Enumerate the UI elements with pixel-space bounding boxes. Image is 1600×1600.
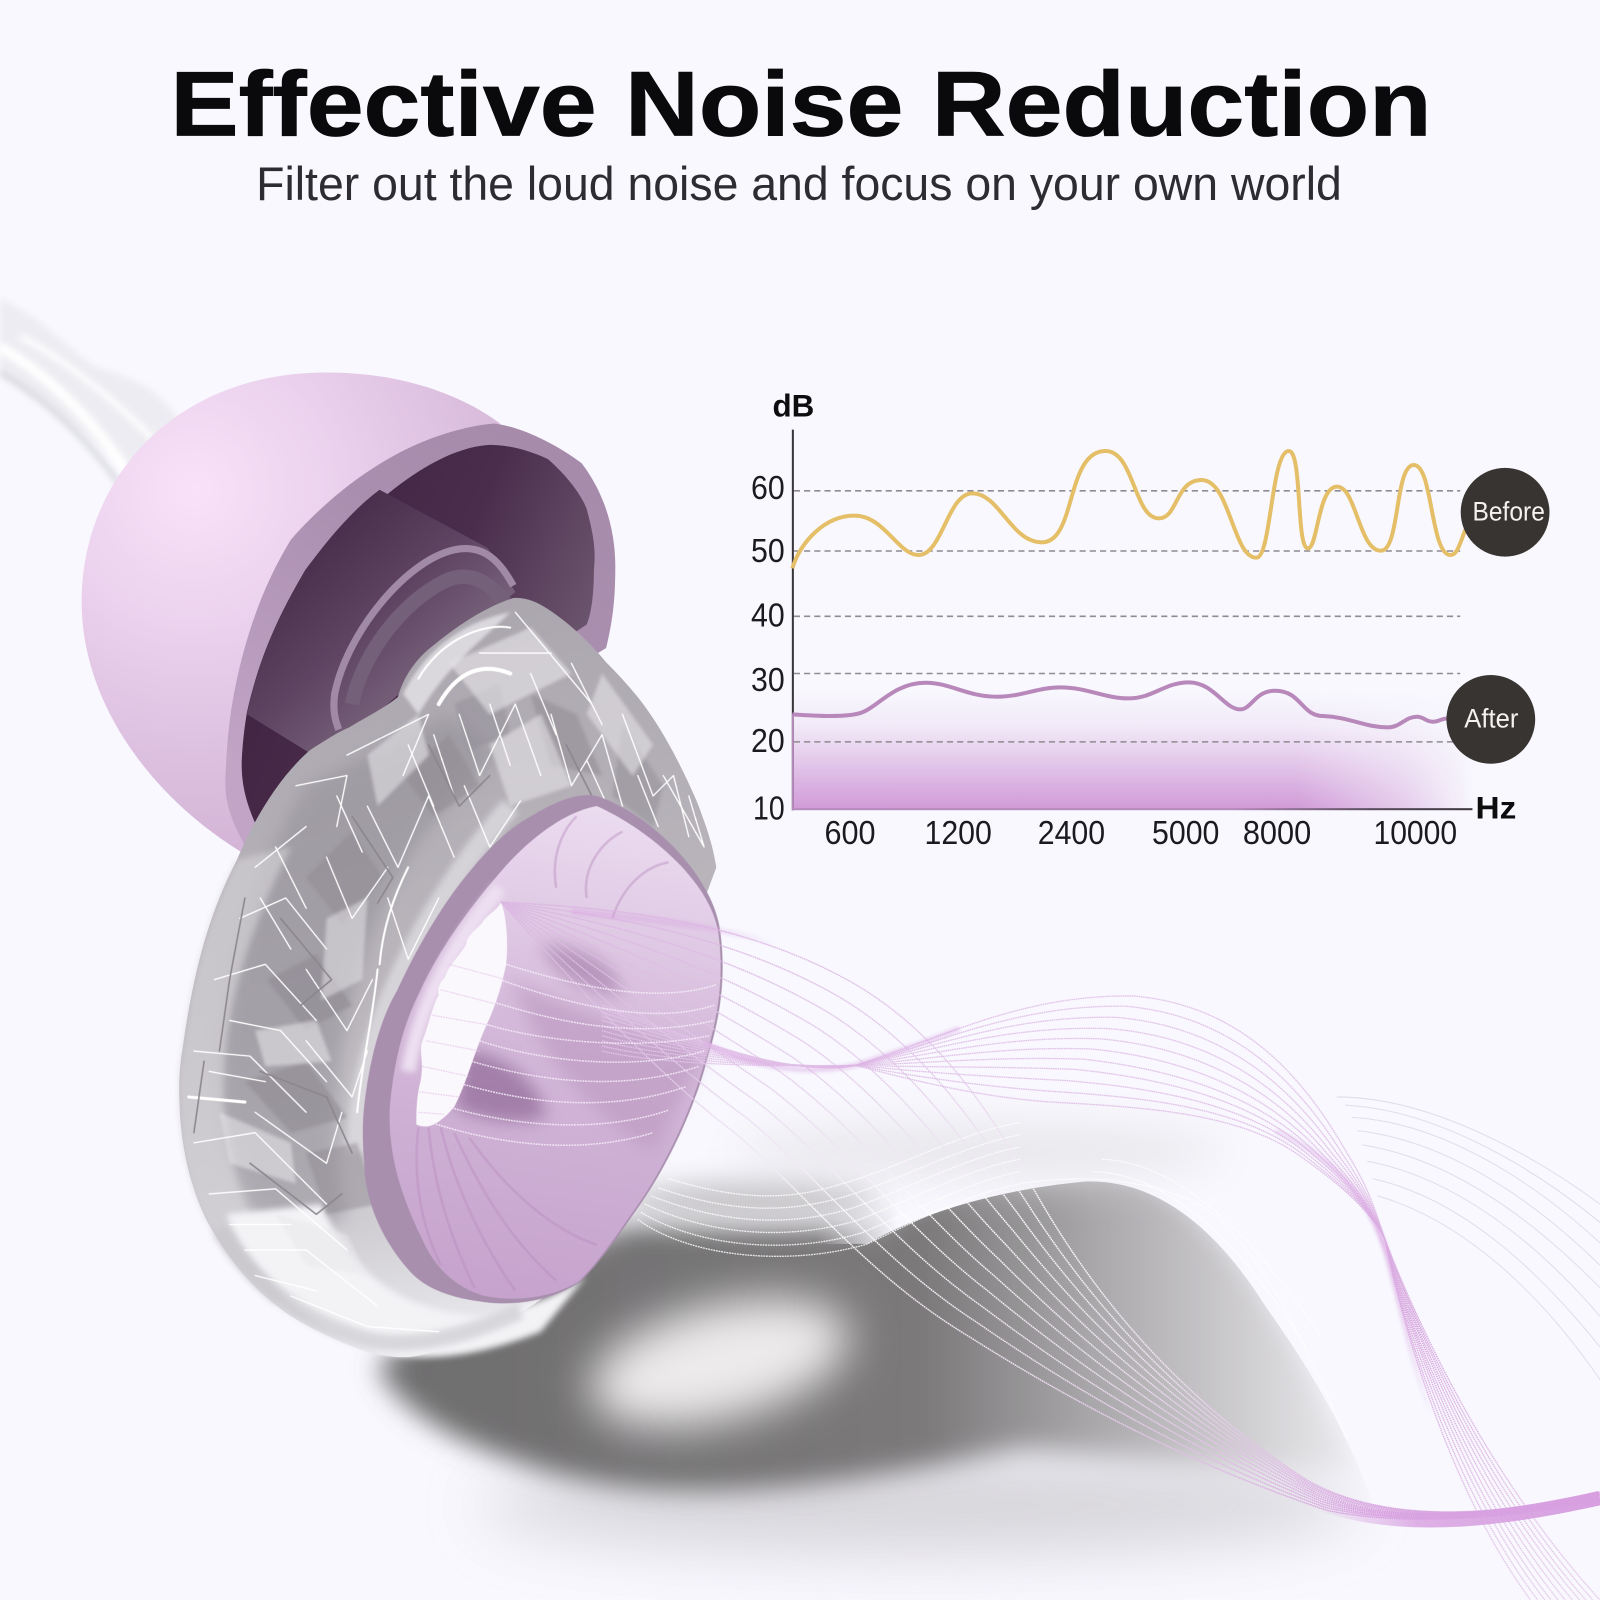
x axis title: Hz (1476, 789, 1516, 825)
dome interior (242, 445, 595, 837)
foam crinkle patches (219, 612, 663, 1276)
ear tip flange (363, 795, 723, 1303)
before curve (792, 451, 1466, 568)
flange inner shading (454, 944, 704, 1153)
subtitle: Filter out the loud noise and focus on your own world (256, 158, 1342, 210)
flange outer rim (363, 795, 723, 1303)
x axis labels: 600 (824, 815, 876, 852)
dome rim (225, 423, 615, 857)
foam inner dark band (219, 714, 500, 1255)
x axis labels: 5000 (1152, 815, 1219, 852)
faint right ribbon (1337, 1097, 1600, 1380)
foam tip (179, 598, 716, 1357)
foam bottom outer texture (219, 1230, 520, 1343)
flange inner face (390, 806, 721, 1299)
floor shadow (378, 1102, 1510, 1554)
foam white streaks (189, 612, 704, 1332)
x axis labels: 1200 (924, 815, 992, 852)
before badge: Before (1472, 496, 1545, 526)
y axis labels: 10 (753, 790, 785, 827)
foam left band (179, 847, 296, 1304)
pink strand across flange top (571, 911, 776, 944)
foam body (179, 598, 716, 1357)
y axis labels: 50 (751, 533, 785, 570)
foam dark creases (194, 745, 633, 1214)
y axis labels: 30 (751, 662, 785, 699)
grey white ribbon over shadow (638, 1122, 1347, 1439)
flange highlight near opening (408, 888, 500, 1071)
noise reduction chart (751, 387, 1549, 852)
second fan inside flange (431, 964, 716, 1145)
axes (793, 430, 1472, 810)
sound wave ribbons (431, 902, 1600, 1600)
lines through opening (418, 964, 506, 1114)
converging pink band (1316, 1498, 1600, 1520)
foam strip along flange (357, 806, 510, 1153)
x axis labels: 8000 (1243, 815, 1311, 852)
after badge: After (1464, 704, 1519, 734)
after area fill (794, 708, 1463, 808)
flange ribs (417, 816, 668, 1291)
x axis labels (824, 815, 1457, 852)
descending pink ribbon (501, 902, 1600, 1519)
crest pink ribbon (602, 996, 1600, 1600)
stem end rings (334, 549, 513, 730)
y axis labels: 40 (751, 598, 785, 635)
after curve (792, 682, 1448, 727)
earplug dome (82, 372, 615, 857)
dome body (82, 372, 500, 857)
after badge (1446, 675, 1535, 764)
foam bottom highlight (227, 1204, 587, 1357)
earplug cable (0, 298, 184, 488)
inner stem (247, 490, 515, 757)
grid lines (794, 491, 1460, 742)
title: Effective Noise Reduction (170, 54, 1432, 156)
y axis labels: 20 (751, 723, 785, 760)
x axis labels: 2400 (1038, 815, 1105, 852)
before badge (1461, 468, 1549, 557)
flange opening (416, 902, 507, 1127)
y axis labels (751, 470, 785, 827)
y axis title: dB (772, 387, 814, 423)
y axis labels: 60 (751, 470, 785, 507)
x axis labels: 10000 (1373, 815, 1457, 852)
